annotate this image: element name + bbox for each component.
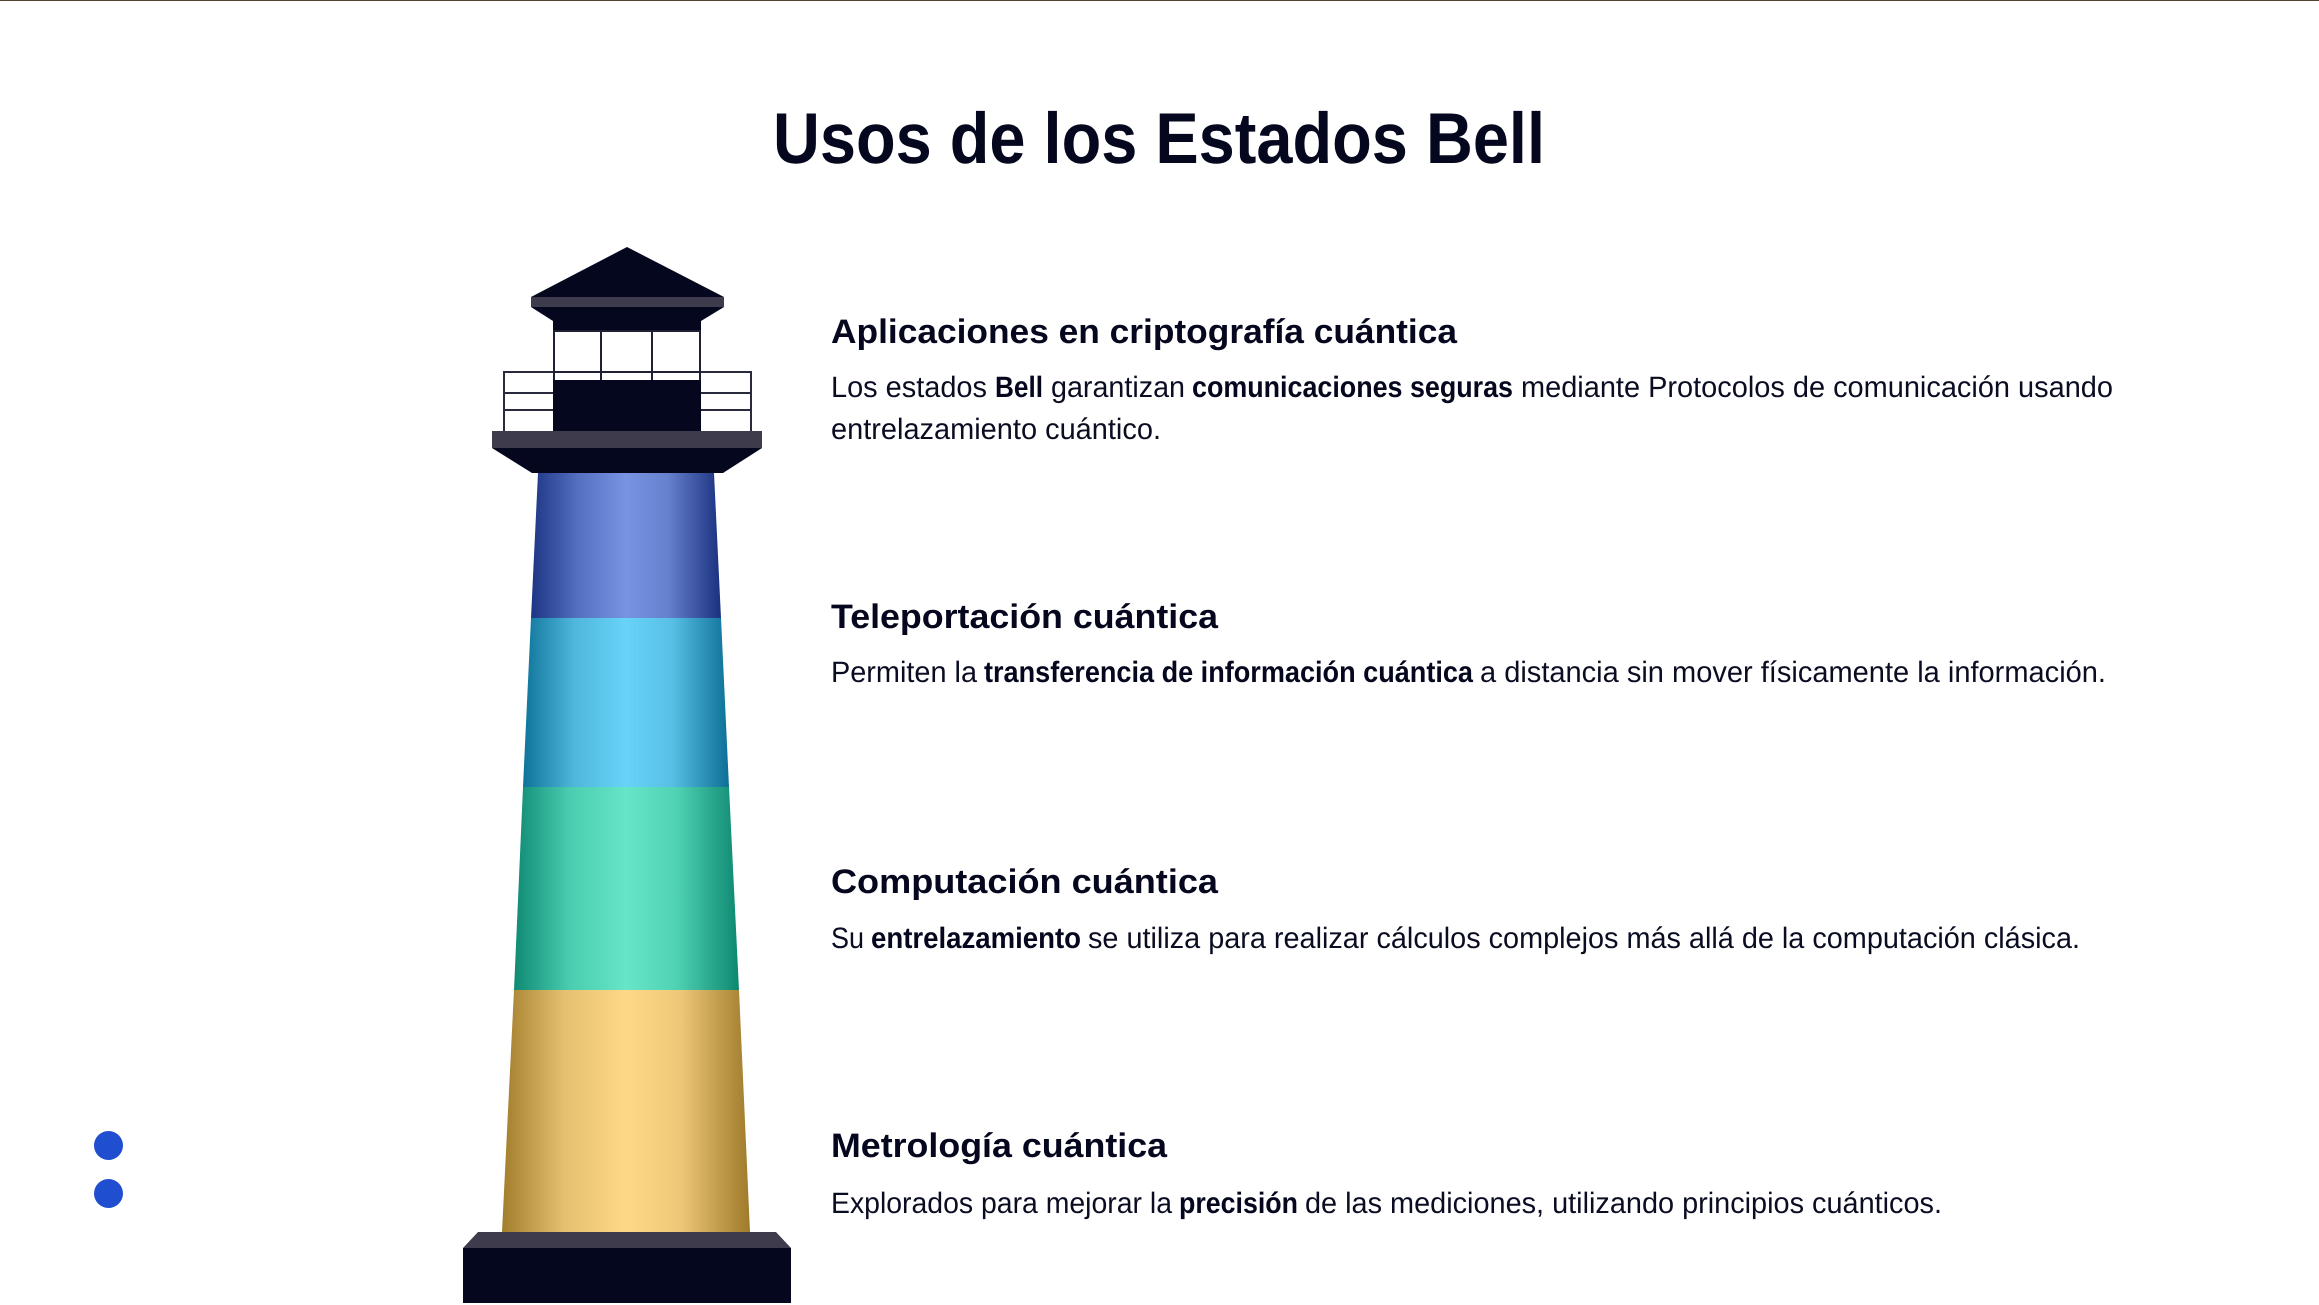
lantern room base — [553, 380, 701, 432]
top border line — [0, 0, 2319, 1]
body text: criptografía: comunicaciones seguras — [1192, 371, 1513, 404]
left railing — [504, 372, 553, 431]
lighthouse base — [463, 1232, 791, 1303]
section: criptografía — [831, 313, 2113, 446]
heading: metrología: Metrología cuántica — [831, 1127, 1168, 1165]
title: Usos de los Estados Bell — [773, 99, 1545, 179]
body text: metrología — [831, 1187, 1942, 1220]
body text: teleportación — [831, 656, 2106, 689]
tower segment: cyan — [523, 618, 729, 787]
lighthouse roof — [531, 247, 724, 331]
navigation dots — [94, 1131, 123, 1208]
body text: computación: entrelazamiento — [871, 922, 1081, 955]
lantern room windows — [554, 331, 700, 381]
section: computación — [831, 863, 2080, 955]
body text: criptografía: Los estados — [831, 371, 987, 404]
body text: metrología: precisión — [1179, 1187, 1298, 1220]
gallery platform — [492, 431, 762, 473]
body text: criptografía: entrelazamiento cuántico. — [831, 413, 1161, 446]
body text: computación: Su — [831, 922, 864, 955]
heading: criptografía: Aplicaciones en criptografía cuántica — [831, 313, 1458, 351]
heading: computación: Computación cuántica — [831, 863, 1219, 901]
tower segment: green — [514, 787, 739, 990]
body text: criptografía — [831, 371, 2113, 446]
body text: teleportación: transferencia de información cuántica — [984, 656, 1474, 689]
section: metrología — [831, 1127, 1942, 1220]
lighthouse illustration — [463, 247, 791, 1303]
body text: criptografía: Bell — [995, 371, 1043, 404]
body text: computación: se utiliza para realizar cálculos complejos más allá de la computación clásica. — [1088, 922, 2080, 955]
body text: criptografía: mediante Protocolos de comunicación usando — [1521, 371, 2113, 404]
body text: criptografía: garantizan — [1051, 371, 1185, 404]
body text: teleportación: Permiten la — [831, 656, 978, 689]
tower segment: gold — [502, 990, 750, 1232]
body text: metrología: de las mediciones, utilizando principios cuánticos. — [1305, 1187, 1942, 1220]
body text: metrología: Explorados para mejorar la — [831, 1187, 1173, 1220]
section: teleportación — [831, 598, 2106, 689]
right railing — [701, 372, 751, 431]
heading: teleportación: Teleportación cuántica — [831, 598, 1219, 636]
body text: teleportación: a distancia sin mover físicamente la información. — [1480, 656, 2106, 689]
tower segment: blue — [531, 473, 721, 618]
